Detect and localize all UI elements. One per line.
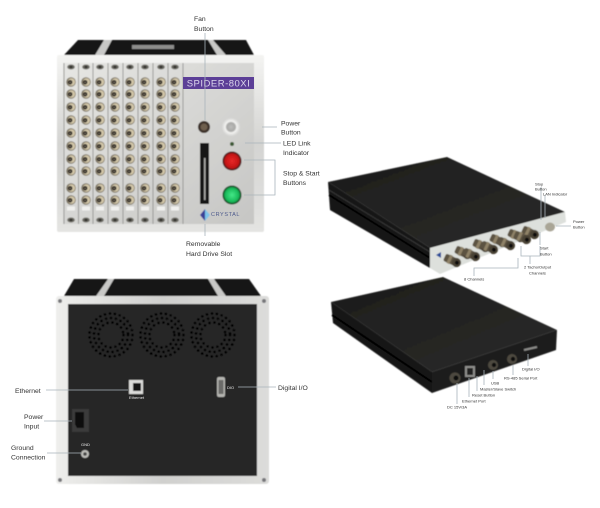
label: stop and start buttons: Buttons: [283, 180, 307, 187]
leader lines: rear view: [44, 387, 276, 453]
label: fan button: Fan: [194, 16, 206, 23]
label: stop and start buttons: Stop & Start: [283, 170, 320, 178]
removable hard drive slot: [200, 143, 209, 204]
label: USB: USB: [491, 380, 500, 386]
label: LAN indicator: LAN Indicator: [543, 192, 568, 196]
label: DC power input: DC 15V/3A: [447, 404, 467, 410]
rear black panel: [68, 304, 257, 476]
rear port captions: [81, 385, 234, 447]
rear ports: [450, 347, 537, 384]
device: Spider-81 top and front view: [328, 157, 566, 274]
logo mark: [200, 209, 210, 221]
leader lines: front view: [205, 33, 281, 236]
label: fan button: Button: [194, 26, 214, 33]
BNC connector grid: [66, 64, 180, 222]
stop button: [222, 152, 242, 170]
label: digital I/O: Digital I/O: [522, 366, 540, 372]
label: power input: Power: [24, 414, 43, 421]
label: ethernet: Ethernet: [15, 388, 41, 395]
label: stop button: Button: [535, 186, 547, 192]
top cover: [331, 277, 557, 372]
model name plate: SPIDER-80XI: [187, 78, 250, 90]
fan button: [198, 121, 210, 133]
front chassis top: [64, 40, 254, 55]
label: tacho output channels: 2 Tacho/Output: [524, 264, 551, 270]
rear port captions: GND: [81, 442, 90, 447]
front chassis frame: [57, 55, 264, 232]
power button: [545, 222, 555, 232]
top cover: [328, 157, 565, 248]
label: RS-485 serial port: RS-485 Serial Port: [504, 376, 538, 380]
label: digital I/O: Digital I/O: [278, 385, 308, 392]
power button: [222, 118, 240, 136]
leader lines: Spider-81 rear: [457, 354, 528, 404]
channel card dividers: [64, 63, 183, 224]
digital I/O connector: [217, 377, 225, 397]
label: power button: Button: [573, 224, 585, 230]
label: removable hard drive slot: Removable: [186, 241, 220, 248]
rear port captions: Ethernet: [129, 395, 145, 400]
silver front face: [430, 212, 566, 274]
label: LED link indicator: LED Link: [283, 140, 311, 148]
ethernet port: [129, 380, 143, 394]
rear chassis top: [64, 279, 261, 296]
label: 8 channels: 8 Channels: [464, 276, 484, 282]
front panel: [63, 63, 254, 224]
label: start button: Start: [540, 246, 548, 250]
LED link indicator: [230, 142, 234, 146]
label: start button: Button: [540, 252, 552, 256]
device: rear view of Spider-80Xi chassis: [56, 279, 269, 484]
label: ground connection: Connection: [11, 454, 46, 462]
device: Spider-81 rear view: [331, 277, 557, 393]
label: master/slave switch: Master/Slave Switch: [480, 386, 516, 392]
left side rail: [331, 302, 432, 393]
left side rail: [328, 182, 430, 268]
label: ground connection: Ground: [11, 445, 34, 452]
label: reset button: Reset Button: [472, 392, 495, 398]
power input socket: [72, 409, 89, 432]
device: front view of Spider-80Xi chassis: [57, 40, 264, 232]
ground connector: [81, 450, 89, 458]
label: power button: Button: [281, 130, 301, 136]
start button: [222, 186, 242, 204]
frame screws: [58, 299, 266, 482]
rear chassis frame: [56, 296, 269, 484]
rear port captions: DIO: [227, 385, 234, 390]
label: ethernet port: Ethernet Port: [462, 398, 486, 404]
BNC channel connectors: [443, 225, 541, 269]
logo wordmark: CRYSTAL: [211, 212, 240, 218]
label: LED link indicator: Indicator: [283, 150, 310, 157]
logo: [436, 252, 441, 258]
label: tacho output channels: Channels: [529, 270, 546, 276]
label: power button: Power: [573, 219, 584, 224]
label: power input: Input: [24, 424, 39, 430]
leader lines: Spider-81 front: [474, 187, 571, 276]
label: stop button: Stop: [535, 182, 543, 186]
fan vent holes: [90, 314, 234, 356]
rear face: [432, 330, 557, 393]
label: removable hard drive slot: Hard Drive Slot: [186, 251, 232, 258]
label: power button: Power: [281, 120, 300, 128]
